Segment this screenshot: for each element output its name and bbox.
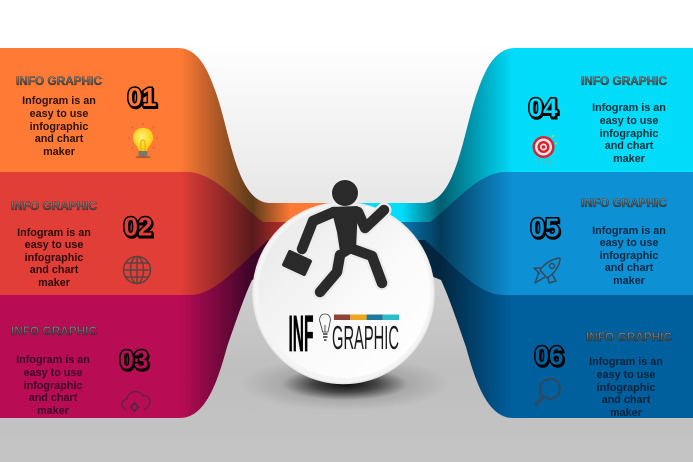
text block 01: and chart (35, 133, 84, 145)
icon: rocket (534, 258, 560, 283)
text block 06: maker (610, 407, 643, 419)
text block 02: Infogram is an (17, 227, 91, 239)
text block 03: Infogram is an (16, 354, 90, 366)
band: deep blue (403, 240, 693, 418)
text block 04: and chart (605, 140, 654, 152)
panel: 06 deep blue (403, 240, 693, 419)
circle shadow (240, 357, 450, 411)
logo bulb (320, 314, 330, 340)
text block 01: Infogram is an (22, 95, 96, 107)
text block 03: infographic (24, 380, 82, 392)
number 03: 03 (120, 344, 148, 374)
text block 06: Infogram is an (589, 356, 663, 368)
band: cyan (348, 48, 693, 260)
number 03: 03 (121, 346, 149, 376)
text block 02: easy to use (25, 239, 83, 251)
icon: cloud gear (122, 392, 150, 412)
text block 02: maker (38, 277, 71, 289)
text block 03: maker (37, 405, 70, 417)
text block 05: infographic (600, 250, 658, 262)
panel: 04 cyan (348, 48, 693, 260)
text block 01: easy to use (30, 108, 88, 120)
panel: 02 red (0, 172, 300, 300)
text block 05: easy to use (600, 237, 658, 249)
panel: 05 blue (393, 172, 693, 300)
text block 05: maker (613, 275, 646, 287)
number 05: 05 (532, 214, 560, 244)
logo: infographic: INF (288, 305, 314, 362)
number 01: 01 (128, 82, 156, 112)
text block 05: and chart (605, 262, 654, 274)
icon: running businessman (281, 180, 384, 292)
number 05: 05 (531, 212, 559, 242)
person halo (281, 180, 384, 292)
icon: magnifier (536, 379, 560, 404)
text block 04: Infogram is an (592, 102, 666, 114)
text block 06: easy to use (597, 369, 655, 381)
text block 03: easy to use (24, 367, 82, 379)
person figure (281, 180, 384, 292)
number 04: 04 (529, 92, 558, 122)
panel: 01 orange (0, 48, 345, 260)
heading 05: INFO GRAPHIC (581, 198, 667, 210)
number 06: 06 (535, 340, 563, 370)
heading 04: INFO GRAPHIC (581, 76, 667, 88)
band: magenta (0, 240, 290, 418)
number 06: 06 (536, 342, 564, 372)
text block 02: and chart (30, 264, 79, 276)
text block 01: infographic (30, 121, 88, 133)
number 04: 04 (530, 94, 559, 124)
heading 02: INFO GRAPHIC (11, 201, 97, 213)
icon: target (532, 135, 557, 164)
number 02: 02 (124, 212, 152, 242)
text block 01: maker (43, 146, 76, 158)
band: orange (0, 48, 345, 260)
central circle (253, 202, 434, 384)
text block 03: and chart (29, 392, 78, 404)
band: red (0, 172, 300, 300)
logo colour bars (334, 314, 399, 320)
icon: globe (124, 256, 150, 284)
number 02: 02 (125, 213, 153, 243)
text block 04: maker (613, 153, 646, 165)
text block 05: Infogram is an (592, 225, 666, 237)
text block 02: infographic (25, 252, 83, 264)
text block 04: easy to use (600, 115, 658, 127)
text: GRAPHIC (332, 319, 399, 356)
heading 01: INFO GRAPHIC (16, 76, 102, 88)
icon: light bulb (128, 124, 158, 158)
text block 06: infographic (597, 382, 655, 394)
heading 06: INFO GRAPHIC (586, 332, 672, 344)
panel: 03 magenta (0, 240, 290, 418)
heading 03: INFO GRAPHIC (11, 326, 97, 338)
text block 06: and chart (602, 394, 651, 406)
number 01: 01 (129, 84, 157, 114)
band: blue (393, 172, 693, 300)
text block 04: infographic (600, 128, 658, 140)
